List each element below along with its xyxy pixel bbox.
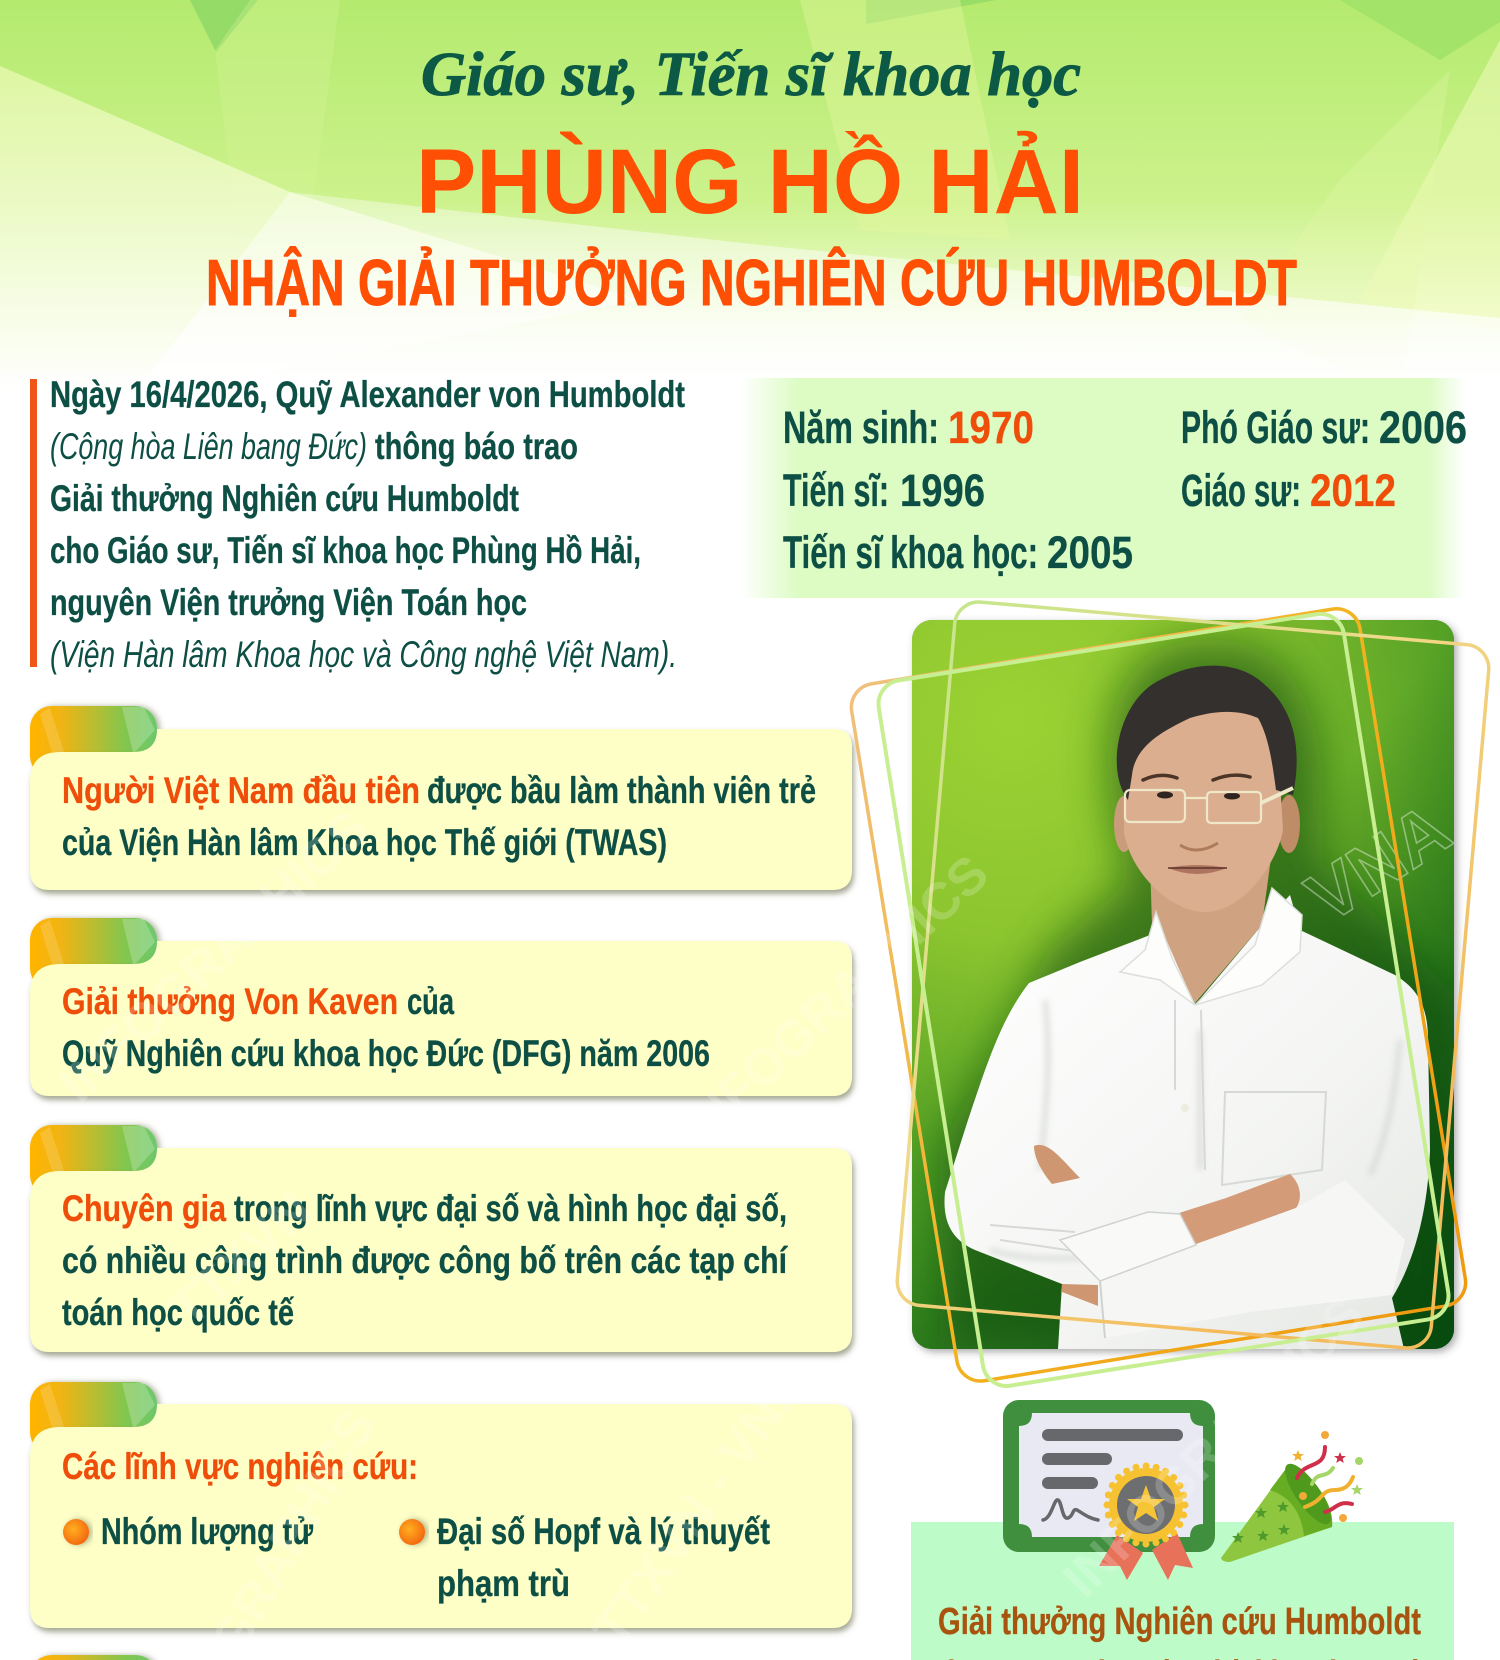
panel: research fields: Nhóm lượng tử xyxy=(101,1511,313,1552)
portrait glow shadow xyxy=(940,640,1460,1349)
watermark: agency credit: INFOGRAPHICS xyxy=(669,844,1000,1159)
panel: key dates: 2012 xyxy=(1310,465,1396,516)
panel: research fields: phạm trù xyxy=(437,1563,570,1604)
man: shirt soft shading xyxy=(990,1000,1403,1262)
panel: key dates: Tiến sĩ khoa học: xyxy=(783,527,1038,578)
man: nose and mouth xyxy=(1180,843,1218,850)
intro paragraph with accent bar: Giải thưởng Nghiên cứu Humboldt xyxy=(50,478,519,519)
panel: first Vietnamese TWAS young member: được bầu làm thành viên trẻ xyxy=(427,770,816,811)
portrait panel xyxy=(912,620,1464,1349)
panel: research fields: Đại số Hopf và lý thuyết xyxy=(437,1511,770,1552)
icon: party popper xyxy=(1221,1431,1363,1562)
panel: Von Kaven prize: của xyxy=(407,981,454,1022)
watermark on portrait: VNA xyxy=(1293,789,1464,938)
intro paragraph with accent bar xyxy=(30,374,685,675)
decorative frames around portrait xyxy=(848,600,1491,1389)
panel: key dates: Giáo sư: xyxy=(1181,465,1301,516)
panel: key dates: Tiến sĩ: xyxy=(783,465,889,516)
panel: key dates: 1996 xyxy=(900,465,985,516)
panel: first Vietnamese TWAS young member: Người Việt Nam đầu tiên xyxy=(62,770,420,811)
panel: expertise: toán học quốc tế xyxy=(62,1292,294,1333)
panel: expertise: có nhiều công trình được công bố trên các tạp chí xyxy=(62,1240,788,1281)
panel: first Vietnamese TWAS young member xyxy=(30,706,852,890)
title: subtitle line: Giáo sư, Tiến sĩ khoa học xyxy=(421,41,1081,109)
man: shirt details xyxy=(990,1000,1326,1255)
watermark: agency credit: INFOGRAPHICS xyxy=(49,799,380,1114)
panel: key dates: 2005 xyxy=(1047,527,1133,578)
watermark: agency credit xyxy=(49,799,1375,1660)
watermark: agency credit: TTXVN - VNA xyxy=(582,1356,817,1657)
intro paragraph with accent bar: thông báo trao xyxy=(375,426,578,467)
panel: about the Humboldt award xyxy=(911,1522,1454,1660)
watermark: agency credit: GRAPHICS xyxy=(200,1399,388,1660)
panel: key dates: Phó Giáo sư: xyxy=(1181,402,1370,453)
man: neck xyxy=(1150,850,1272,1003)
panel: key dates: 1970 xyxy=(948,402,1034,453)
panel: key dates: 2006 xyxy=(1379,402,1467,453)
man: hair xyxy=(1117,666,1297,800)
intro paragraph with accent bar: (Viện Hàn lâm Khoa học và Công nghệ Việt Nam). xyxy=(50,634,677,675)
man: right arm top sleeve xyxy=(1129,1189,1405,1322)
watermark: agency credit: TTXVN xyxy=(159,1180,323,1339)
panel: Von Kaven prize xyxy=(30,918,852,1096)
man: head xyxy=(1114,796,1128,852)
panel: Von Kaven prize: Giải thưởng Von Kaven xyxy=(62,981,398,1022)
man: glasses xyxy=(1125,788,1293,823)
man: collar xyxy=(1120,888,1302,1005)
panel: research fields xyxy=(30,1382,852,1628)
intro paragraph with accent bar: Ngày 16/4/2026, Quỹ Alexander von Humboldt xyxy=(50,374,685,415)
intro paragraph with accent bar: cho Giáo sư, Tiến sĩ khoa học Phùng Hồ Hải, xyxy=(50,530,641,571)
panel: first Vietnamese TWAS young member: của Viện Hàn lâm Khoa học Thế giới (TWAS) xyxy=(62,822,667,863)
panel: expertise: trong lĩnh vực đại số và hình học đại số, xyxy=(234,1188,787,1229)
panel: key dates: Năm sinh: xyxy=(783,402,939,453)
panel: key dates xyxy=(740,378,1467,598)
man: brows and eyes xyxy=(1143,775,1250,780)
man: hands xyxy=(1034,1145,1098,1306)
man: forearm skin xyxy=(1176,1174,1300,1246)
background: faceted green header xyxy=(0,0,1500,415)
panel: expertise xyxy=(30,1125,852,1352)
intro paragraph with accent bar: nguyên Viện trưởng Viện Toán học xyxy=(50,582,527,623)
man: white shirt xyxy=(944,895,1430,1349)
man: left sleeve cuff xyxy=(1060,1212,1196,1281)
panel: expertise: Chuyên gia xyxy=(62,1188,226,1229)
panel: research fields: Các lĩnh vực nghiên cứu: xyxy=(62,1446,418,1487)
panel tab: next item, cut off at page edge xyxy=(30,1655,157,1660)
title: name: PHÙNG HỒ HẢI xyxy=(416,130,1084,233)
icon: certificate with seal xyxy=(1003,1400,1215,1580)
watermark: agency credit: INFOGRAPHICS xyxy=(1052,1286,1375,1608)
intro paragraph with accent bar: (Cộng hòa Liên bang Đức) xyxy=(50,426,367,467)
panel: Von Kaven prize: Quỹ Nghiên cứu khoa học Đức (DFG) năm 2006 xyxy=(62,1033,710,1074)
